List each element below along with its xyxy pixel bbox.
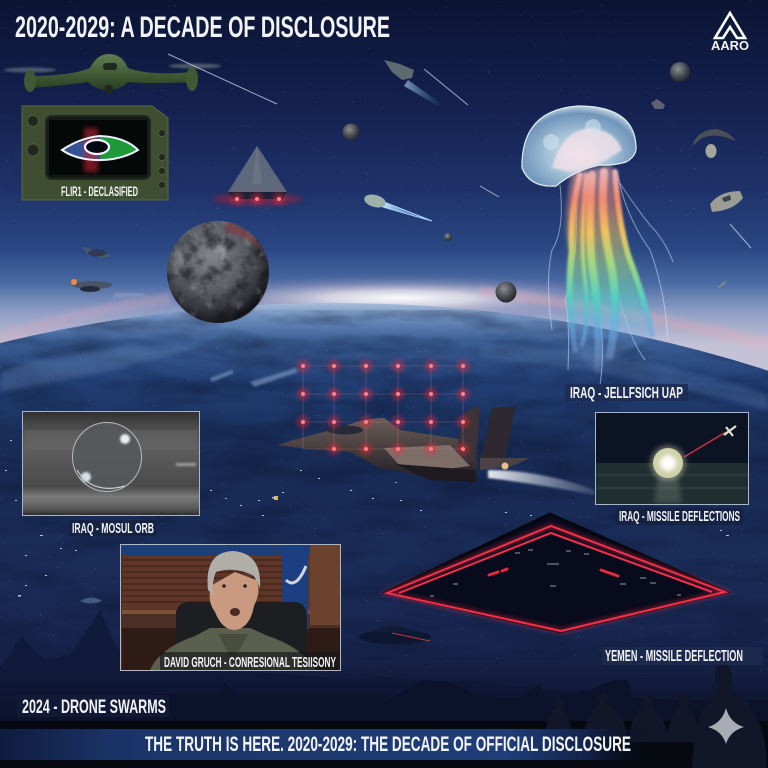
glass orb	[72, 422, 142, 492]
earth surface	[0, 303, 768, 716]
panel: missile deflection footage	[596, 412, 748, 504]
F-15 fighter jet	[277, 406, 530, 482]
drone at top left	[4, 54, 221, 94]
chair	[176, 602, 307, 660]
upper center saucer with trail	[384, 60, 442, 106]
glowing orb	[650, 445, 686, 481]
title: 2020-2029: A DECADE OF DISCLOSURE	[15, 11, 390, 44]
triangular UAP	[212, 146, 302, 205]
missile	[724, 426, 736, 436]
caption: jellyfish UAP: IRAQ - JELLFSICH UAP	[570, 385, 683, 402]
testimony caption: DAVID GRUCH - CONRESIONAL TESIISONY	[164, 654, 336, 671]
crowd silhouettes	[545, 662, 766, 768]
jet exhaust plume	[488, 470, 595, 495]
icon: four-point sparkle	[708, 708, 744, 744]
small sphere near triangle	[342, 124, 360, 140]
AARO logo	[711, 13, 749, 53]
stars	[0, 0, 768, 230]
laser beam	[684, 432, 726, 457]
airbase skyline	[0, 680, 768, 768]
small saucer below diamond	[359, 626, 431, 644]
ground fade	[0, 721, 768, 768]
coastal city lights	[5, 368, 729, 596]
metallic sphere	[167, 221, 269, 323]
FLIR caption: FLIR1 - DECLASIFIED	[61, 184, 138, 199]
caption: 2024 drone swarms: 2024 - DRONE SWARMS	[22, 696, 166, 718]
panel: Mosul orb footage	[22, 412, 200, 516]
caption: Mosul orb: IRAQ - MOSUL ORB	[72, 521, 154, 537]
caption: jellyfish UAP	[565, 384, 688, 402]
small rocks	[444, 62, 743, 302]
dim saucer lower left	[80, 598, 102, 604]
mountains silhouette	[0, 610, 768, 768]
saucer with blue trail	[363, 192, 432, 221]
testimony caption	[160, 652, 340, 671]
flag	[282, 545, 308, 630]
AARO logo: AARO	[711, 39, 749, 53]
thermal UFO signature	[62, 128, 138, 172]
FLIR hardware buttons	[27, 116, 166, 188]
saucers on the left	[71, 247, 146, 298]
meteor streak top	[168, 54, 277, 104]
panel: David Grusch testimony	[120, 544, 340, 671]
person	[150, 551, 316, 670]
jellyfish UAP	[522, 106, 673, 385]
bottom banner	[0, 729, 650, 760]
panel: FLIR display	[22, 106, 168, 200]
city lights speckle	[0, 345, 768, 675]
meteor streaks	[424, 69, 751, 248]
black diamond craft with red outline	[386, 514, 726, 632]
red light grid formation	[297, 360, 469, 455]
caption: Mosul orb	[69, 520, 156, 537]
caption: 2024 drone swarms	[17, 695, 169, 718]
rainbow tentacle mass	[566, 165, 650, 372]
horizon glow	[0, 274, 768, 350]
